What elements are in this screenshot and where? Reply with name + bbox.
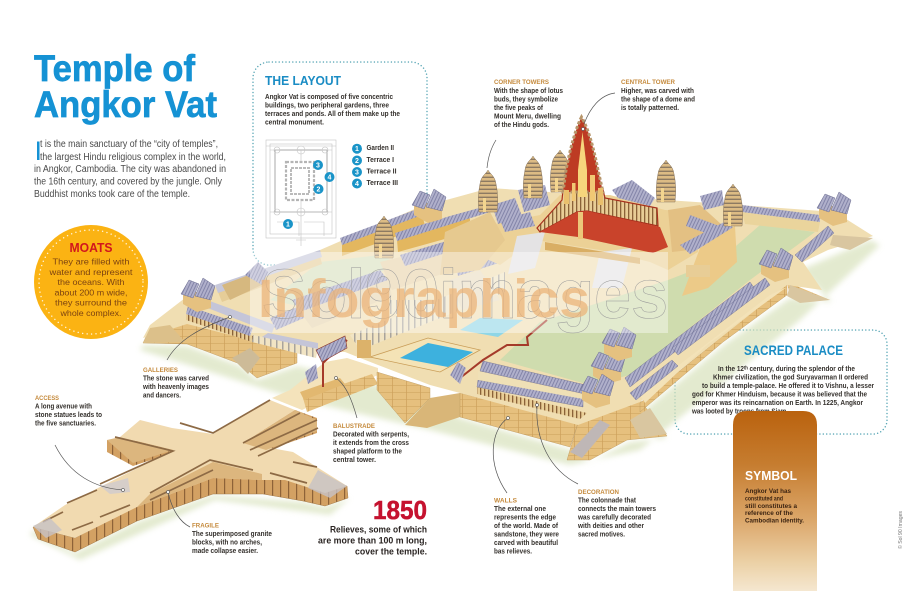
callout: moats: about 200 m wide, [54,288,128,298]
floor plan diagram: 4 [328,174,332,182]
causeway side walls [33,470,348,552]
label: walls: The external one [494,504,546,513]
illustration: temple complex [30,117,880,560]
plan legend: Terrace I [366,155,394,164]
inner temple body [440,180,737,296]
back wall right [742,205,820,232]
intro text block: Buddhist monks took care of the temple. [34,189,190,200]
connectors: leader lines [55,93,615,527]
floor plan diagram: 1 [286,222,290,228]
floor plan diagram [266,140,336,246]
label: walls [494,498,559,556]
stat: 1850 relieves: cover the temple. [355,546,427,558]
panel: sacred palace text: In the 12ᵗʰ century, during the splendor of the [718,364,855,373]
label: fragile: The superimposed granite [192,529,272,538]
stat: 1850 relieves: Relieves, some of which [330,524,427,536]
label: galleries: with heavenly images [142,382,209,391]
panel: symbol: Cambodian identity. [745,518,804,524]
layout description: buildings, two peripheral gardens, three [265,100,389,110]
label: fragile: made collapse easier. [192,546,258,555]
plan legend: Terrace III [366,178,398,187]
intro text block: I [34,136,42,166]
label: decoration: sacred motives. [578,530,625,538]
plan legend: 1 [355,146,359,153]
inner galleries and roofs left of centre [222,240,502,330]
causeway: cross-shaped access platform [33,400,348,552]
temple base walls [143,282,830,460]
lawn: left garden [270,255,400,306]
label: walls: sandstone, they were [494,530,559,538]
label: corner towers: Mount Meru, dwelling [494,112,561,120]
pavilions [181,189,851,408]
panel: sacred palace text: was looted by troops from Siam. [691,406,788,416]
panel: symbol: Angkor Vat has [745,488,791,495]
label: access: ACCESS [35,395,59,402]
label: walls: of the world. Made of [494,521,559,530]
label: galleries: The stone was carved [143,374,209,382]
layout description: terraces and ponds. All of them make up the [265,109,400,118]
panel: the layout [253,62,427,265]
callout: moats [34,225,148,339]
panel: sacred palace text: emperor was its reincarnation on Earth. In 1225, Angkor [692,398,863,407]
title: Temple of [34,48,196,89]
causeway north-east arm wall [243,410,317,452]
galleries right side [625,226,834,403]
callout: moats: they surround the [55,298,127,308]
intro text block: the largest Hindu religious complex in the world, [40,152,226,163]
panel: symbol: reference of the [745,510,793,517]
label: central tower [621,79,695,112]
layout description: central monument. [265,118,324,126]
label: access: the five sanctuaries. [35,418,96,428]
heading: the layout: THE LAYOUT [265,73,341,88]
entrance tongue [272,358,378,412]
plan legend: 2 [355,158,359,165]
label: balustrade: central tower. [333,455,376,464]
label: balustrade: shaped platform to the [333,446,402,456]
label: corner towers: the five peaks of [494,103,544,112]
callout: moats: the oceans. With [58,277,125,287]
back wall left [215,205,490,302]
panel: sacred palace frame [675,330,887,434]
icon: corner towers [374,150,743,258]
label: corner towers: CORNER TOWERS [494,79,549,86]
pool block [370,338,480,372]
callout: moats: They are filled with [52,256,130,266]
watermark: Sol90images [262,255,668,333]
panel: sacred palace text: SACRED PALACE [744,342,843,358]
label: access: stone statues leads to [35,410,103,419]
label: balustrade: it extends from the cross [333,438,409,447]
plan legend: 4 [355,181,359,188]
callout: moats: water and represent [48,267,133,277]
label: fragile: FRAGILE [192,522,219,530]
pool: upper [460,318,523,337]
label: decoration: was carefully decorated [577,512,651,522]
panel: sacred palace text: to build a temple-palace. He offered it to Vishnu, a lesser [702,381,874,390]
red boundary path [323,320,547,387]
causeway north-west arm wall [107,440,175,466]
label: walls: carved with beautiful [494,538,558,547]
watermark: Infographics [258,269,590,329]
central tower [537,117,668,253]
intro text block: the 16th century, and covered by the jungle. Only [34,176,222,188]
stat: 1850 relieves: are more than 100 m long, [318,536,427,546]
temple upper platform [143,188,873,425]
panel: symbol: constituted and [745,496,783,502]
panel: symbol [733,411,817,591]
label: decoration: DECORATION [578,489,619,496]
label: corner towers: of the Hindu gods. [494,120,549,129]
label: central tower: is totally patterned. [621,103,679,112]
stat: 1850 relieves [318,495,427,558]
label: access: A long avenue with [35,402,92,410]
label: central tower: CENTRAL TOWER [621,79,675,86]
label: corner towers: buds, they symbolize [494,94,558,104]
layout description [265,92,400,126]
label: galleries [142,367,209,400]
title [34,48,217,125]
intro text block [34,136,226,200]
panel: symbol: SYMBOL [745,468,797,483]
label: decoration: with deities and other [577,521,644,530]
plan legend: Terrace II [366,166,396,176]
intro text block: in Angkor, Cambodia. The city was abandoned in [34,164,226,175]
panel: symbol: still constitutes a [745,503,797,510]
stat: 1850 relieves: 1850 [373,495,427,525]
floor plan diagram: 2 [317,186,321,194]
label: fragile: blocks, with no arches, [192,538,262,546]
label: central tower: the shape of a dome and [621,94,695,104]
label: walls: WALLS [494,498,517,504]
causeway stepped terraces [107,410,317,507]
stairs and bastions [143,235,873,458]
galleries left front [186,300,371,384]
galleries front [477,361,590,419]
floor plan diagram: 3 [316,162,320,170]
label: central tower: Higher, was carved with [621,86,694,95]
pool: lower [400,343,473,367]
panel: sacred palace text [691,342,874,416]
soft ground shadow [30,240,880,560]
plan legend: Garden II [366,143,394,152]
layout description: Angkor Vat is composed of five concentric [265,92,393,101]
label: walls: bas relieves. [494,546,532,556]
label: balustrade: Decorated with serpents, [333,430,409,438]
plan legend: 3 [355,170,359,176]
label: decoration: connects the main towers [578,504,656,513]
label: decoration [577,489,656,538]
title: Angkor Vat [34,84,217,125]
panel: sacred palace text: Khmer civilization, the god Suryavarman II ordered [713,372,868,382]
causeway top surface [33,400,347,538]
callout: moats: MOATS [70,240,113,255]
label: balustrade [333,423,409,464]
label: corner towers: With the shape of lotus [494,86,563,95]
label: corner towers [494,79,563,129]
label: galleries: GALLERIES [143,367,178,374]
callout: moats: whole complex. [59,308,122,318]
label: balustrade: BALUSTRADE [333,423,375,430]
label: decoration: The colonnade that [578,496,637,504]
intro text block: t is the main sanctuary of the “city of temples”, [40,139,218,150]
panel: sacred palace text: god for Khmer Hinduism, because it was believed that the [692,390,867,398]
label: access [35,395,103,428]
label: fragile [192,522,272,555]
inner colonnade diagonal [350,272,505,350]
plan legend [352,143,398,188]
label: galleries: and dancers. [143,390,181,400]
lawn: right garden [500,225,815,385]
label: walls: represents the edge [494,512,556,522]
credit: © Sol 90 Images [897,511,904,549]
